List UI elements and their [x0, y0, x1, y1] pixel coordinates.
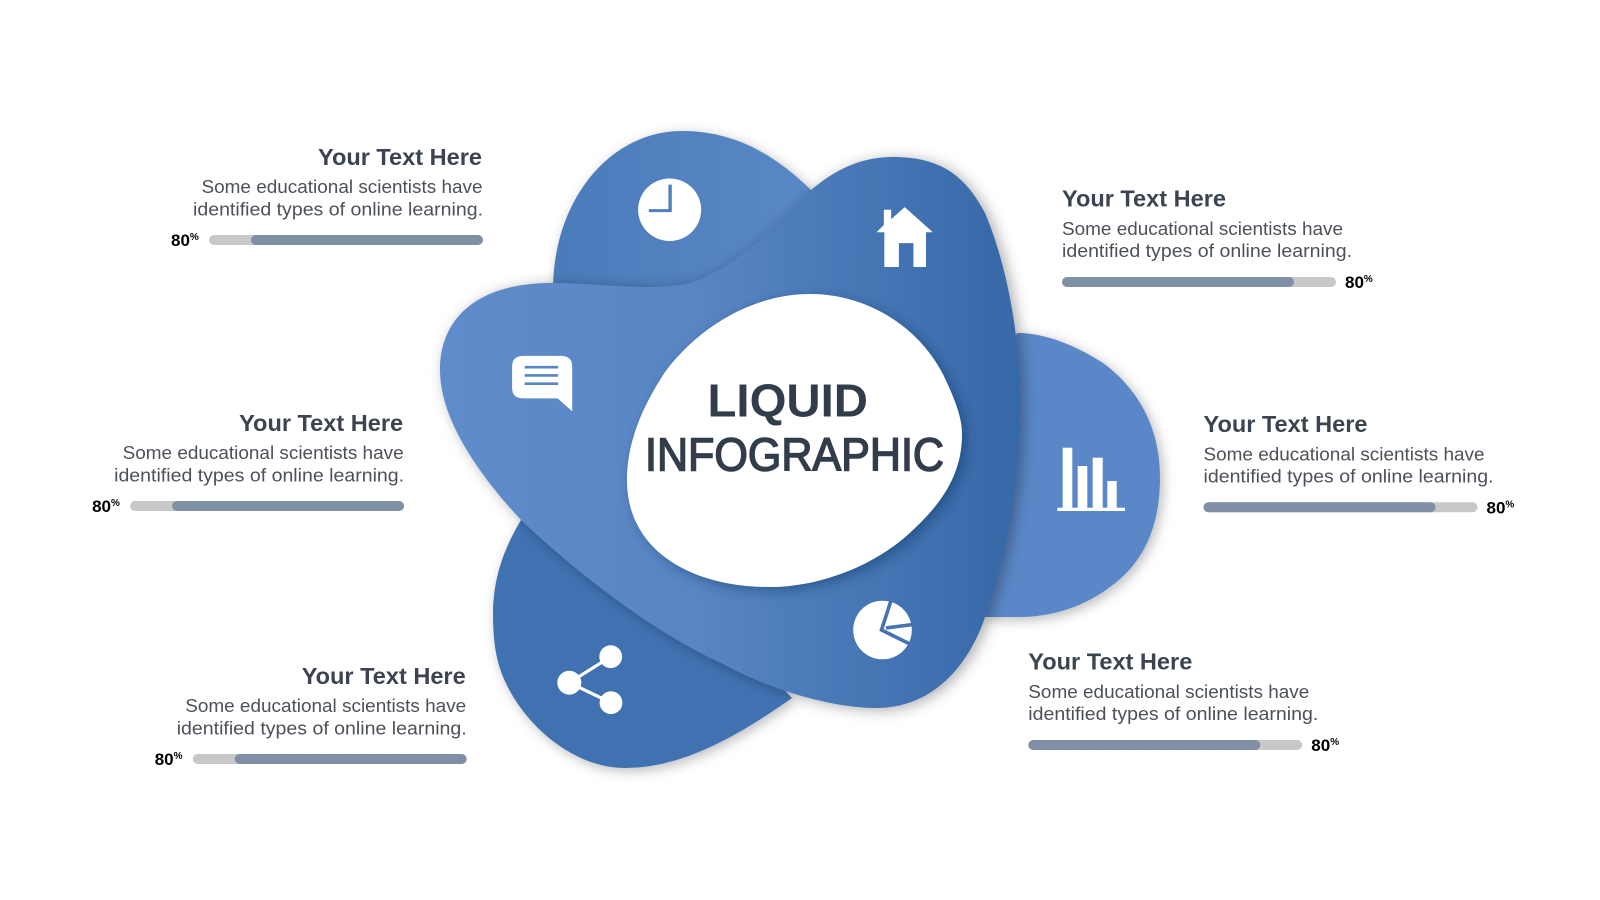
percent label: %	[1364, 274, 1373, 285]
center white blob	[627, 294, 962, 587]
percent label: %	[190, 232, 199, 243]
panel: middle left	[92, 410, 404, 516]
heading: Your Text Here	[302, 663, 466, 689]
body text: Some educational scientists have	[1204, 443, 1484, 464]
icon: bar chart	[1057, 448, 1125, 511]
progress bar	[193, 754, 467, 764]
petal: clock	[553, 131, 811, 300]
icon: house	[877, 207, 933, 267]
body text: identified types of online learning.	[1062, 240, 1352, 261]
body text	[1062, 218, 1352, 261]
body text	[1028, 681, 1318, 724]
panel: top right	[1062, 186, 1373, 292]
icon: pie chart	[853, 599, 913, 659]
panel: bottom right	[1028, 648, 1339, 755]
progress bar	[1062, 277, 1336, 287]
icon: speech bubble	[512, 356, 572, 411]
heading: Your Text Here	[1062, 186, 1226, 212]
body text	[1204, 443, 1494, 486]
percent label: %	[1330, 737, 1339, 748]
title	[645, 375, 944, 481]
percent label: 80	[155, 750, 174, 769]
progress bar	[209, 235, 483, 245]
body text	[177, 695, 467, 738]
liquid blob diagram	[440, 131, 1160, 768]
body text: identified types of online learning.	[114, 464, 404, 486]
panel: middle right	[1204, 411, 1514, 517]
heading: Your Text Here	[1204, 411, 1368, 437]
progress bar	[1204, 502, 1478, 512]
body text	[114, 442, 404, 486]
body text: Some educational scientists have	[123, 442, 404, 463]
heading: Your Text Here	[239, 410, 403, 436]
percent label: %	[1505, 499, 1514, 510]
percent label: %	[111, 498, 120, 509]
petal: share	[493, 520, 792, 768]
icon: share	[557, 645, 622, 714]
body text: Some educational scientists have	[1062, 218, 1343, 239]
body text: identified types of online learning.	[1028, 703, 1318, 724]
panel: bottom left	[155, 663, 467, 769]
percent label: 80	[92, 497, 111, 516]
percent label: %	[174, 751, 183, 762]
petal: bar chart	[960, 333, 1160, 617]
percent label: 80	[1345, 273, 1364, 292]
main blob	[440, 157, 1020, 708]
progress bar	[1028, 740, 1302, 750]
body text: Some educational scientists have	[185, 695, 466, 716]
panel: top left	[171, 144, 483, 250]
heading: Your Text Here	[1028, 648, 1192, 674]
small icons	[512, 179, 933, 411]
body text: identified types of online learning.	[177, 718, 467, 738]
progress bar	[130, 501, 404, 511]
icon: clock	[638, 179, 701, 241]
percent label: 80	[1486, 498, 1505, 517]
body text	[193, 176, 483, 220]
body text: Some educational scientists have	[202, 176, 482, 197]
title: INFOGRAPHIC	[645, 429, 944, 481]
percent label: 80	[171, 231, 190, 250]
body text: identified types of online learning.	[193, 198, 483, 220]
title: LIQUID	[708, 375, 868, 427]
heading: Your Text Here	[318, 144, 482, 170]
body text: Some educational scientists have	[1028, 681, 1309, 702]
body text: identified types of online learning.	[1204, 465, 1494, 486]
percent label: 80	[1311, 736, 1330, 755]
